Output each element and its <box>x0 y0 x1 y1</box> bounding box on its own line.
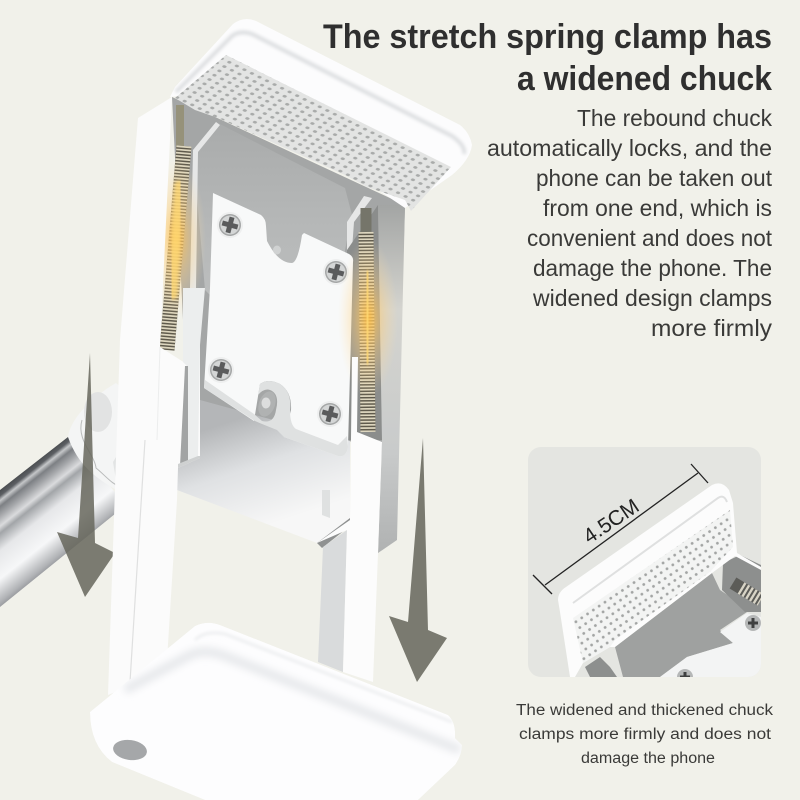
screw bottom right <box>314 398 346 430</box>
description text <box>487 105 773 341</box>
spring glow right <box>338 238 398 398</box>
description text: automatically locks, and the <box>487 135 772 161</box>
clamp knob joining arm and holder <box>68 383 147 495</box>
description text: widened design clamps <box>532 285 772 311</box>
upper notch pin <box>273 246 281 254</box>
title: The stretch spring clamp has <box>323 18 772 56</box>
holder left column <box>108 97 205 695</box>
inset right channel <box>722 555 761 612</box>
inset caption: The widened and thickened chuck <box>516 702 773 719</box>
dimension label: 4.5CM <box>579 495 643 548</box>
description text: The rebound chuck <box>577 105 772 131</box>
spring glow left <box>146 158 206 318</box>
spring left <box>167 105 184 350</box>
top chuck with dotted pad <box>170 19 472 211</box>
arrow: left downward <box>57 353 115 597</box>
inset compartment <box>615 573 750 677</box>
description text: phone can be taken out <box>536 165 773 191</box>
arrow: right downward <box>389 438 447 682</box>
description text: damage the phone. The <box>533 255 772 281</box>
description text: convenient and does not <box>527 225 773 251</box>
lower holder box <box>177 395 350 548</box>
locating pin <box>255 389 279 419</box>
spring right <box>366 208 368 432</box>
dotted grip pad <box>175 55 451 211</box>
mounting plate with screws <box>204 193 353 456</box>
inset panel: chuck width detail <box>528 447 761 685</box>
inset dotted pad <box>573 510 733 663</box>
inset caption: clamps more firmly and does not <box>519 726 772 743</box>
inset caption: damage the phone <box>581 750 715 767</box>
screw top right <box>320 256 352 288</box>
screw top left <box>214 209 246 241</box>
chuck outer shell <box>170 19 472 208</box>
bottom chuck <box>90 623 462 800</box>
description text: more firmly <box>651 315 773 341</box>
screw bottom left <box>205 354 237 386</box>
holder right column <box>317 357 382 682</box>
description text: from one end, which is <box>543 195 772 221</box>
title: a widened chuck <box>517 60 772 98</box>
title <box>323 18 772 98</box>
inset spring <box>733 583 761 600</box>
inset lower left channel <box>585 657 617 677</box>
inset chuck shell <box>558 483 761 677</box>
compartment back wall <box>172 97 405 460</box>
inset mounting plate <box>660 613 761 677</box>
metal support arm <box>0 437 126 607</box>
right wall of holder <box>378 205 405 553</box>
inset screw right <box>745 615 761 631</box>
dimension line: 4.5CM <box>533 464 708 594</box>
inset screw <box>677 669 693 677</box>
inset caption <box>516 702 773 767</box>
strap hole <box>113 740 147 760</box>
